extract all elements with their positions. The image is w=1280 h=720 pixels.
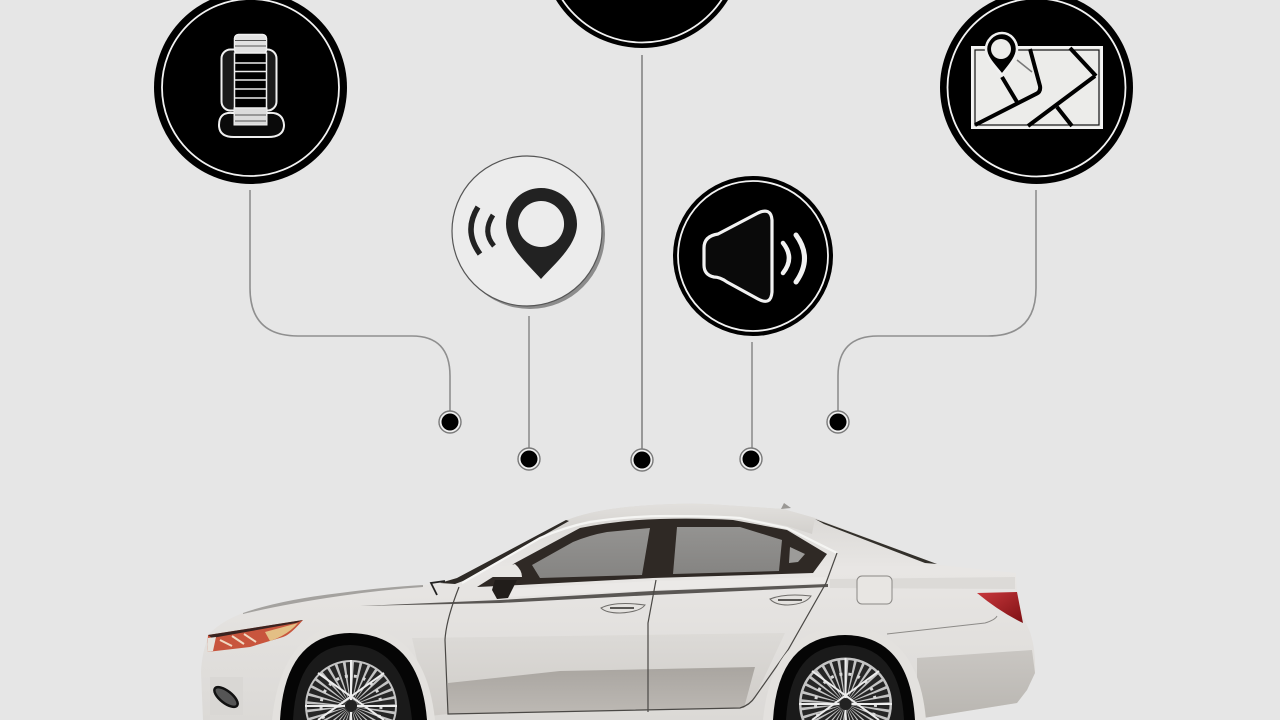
windshield bbox=[440, 520, 569, 584]
door lower dark shade bbox=[448, 667, 755, 714]
door sill stripe bbox=[505, 577, 826, 597]
connector: audio to car bbox=[740, 342, 762, 470]
fog lamp bbox=[211, 684, 241, 710]
icon: location signal bbox=[452, 156, 605, 309]
icon: top circle (cropped) bbox=[541, 0, 743, 48]
body crease bbox=[887, 616, 997, 634]
door handle front bbox=[601, 604, 645, 613]
belt line bbox=[360, 584, 828, 606]
car bbox=[201, 503, 1035, 720]
rear window bbox=[815, 519, 937, 564]
rear wheel arch ridge bbox=[763, 627, 926, 720]
connector: seat to car bbox=[250, 190, 461, 433]
connector: location to car bbox=[518, 316, 540, 470]
door outlines bbox=[445, 553, 837, 714]
rear wheel bbox=[773, 635, 915, 720]
icon: car seat bbox=[154, 0, 347, 184]
wiper bbox=[431, 581, 445, 595]
rear bumper shade bbox=[917, 650, 1035, 719]
antenna bbox=[781, 503, 791, 509]
front wheel arch ridge bbox=[272, 625, 435, 720]
fog lamp recess bbox=[210, 677, 243, 715]
mirror stalk bbox=[492, 580, 517, 599]
door lower light shade bbox=[412, 633, 785, 716]
roof panel bbox=[457, 504, 815, 581]
side mirror bbox=[490, 564, 522, 577]
rear glass bbox=[673, 527, 782, 574]
window frame bbox=[477, 519, 827, 587]
rear deck band bbox=[830, 577, 1015, 589]
icon: audio speaker bbox=[673, 176, 833, 336]
front wheel bbox=[280, 633, 427, 720]
tail light bbox=[977, 592, 1023, 623]
connector: top icon to car bbox=[631, 55, 653, 471]
headlight bbox=[207, 620, 303, 652]
front glass bbox=[532, 528, 650, 578]
connector: navigation to car bbox=[827, 190, 1036, 433]
door handle rear bbox=[770, 595, 811, 605]
chrome trim bbox=[462, 516, 837, 583]
fuel door bbox=[857, 576, 892, 604]
quarter glass bbox=[789, 547, 805, 563]
icon: navigation map bbox=[940, 0, 1133, 184]
hood stripe bbox=[243, 585, 423, 614]
car body bbox=[201, 504, 1035, 720]
